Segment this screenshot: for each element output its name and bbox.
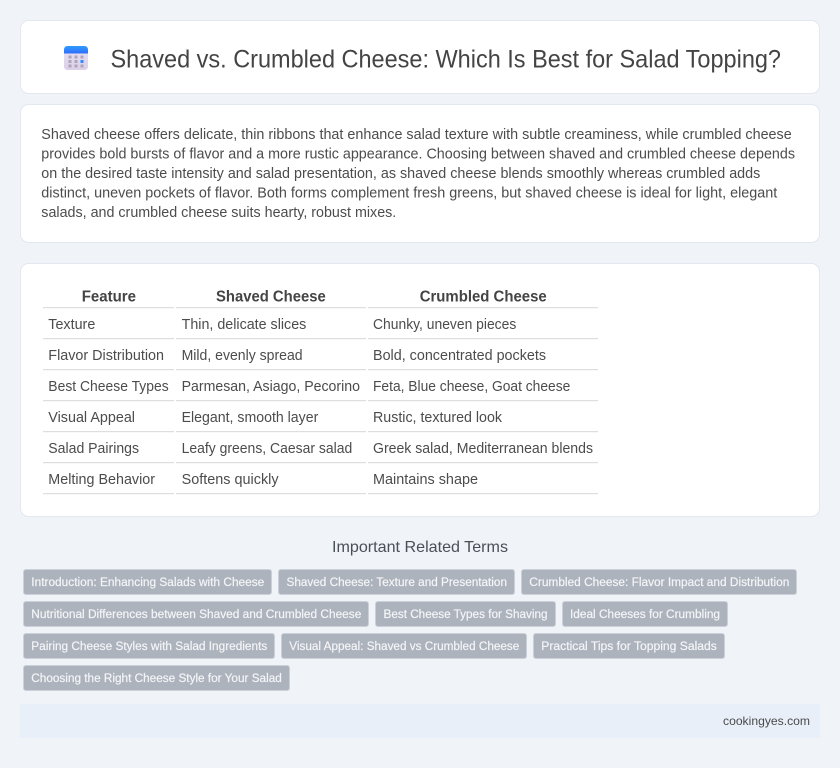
table row: best cheese types: Parmesan, Asiago, Pecorino — [182, 379, 360, 395]
table row: best cheese types: Feta, Blue cheese, Goat cheese — [373, 379, 570, 395]
tag: visual appeal — [282, 634, 526, 658]
tag: nutritional differences: Nutritional Differences between Shaved and Crumbled Cheese — [31, 607, 362, 621]
footer — [20, 704, 820, 738]
table row: visual appeal: Elegant, smooth layer — [182, 410, 318, 426]
tag: practical tips — [534, 634, 724, 658]
tag list: related terms — [24, 570, 796, 690]
table row: texture: Texture — [48, 317, 95, 333]
tag: pairing cheese styles: Pairing Cheese Styles with Salad Ingredients — [31, 639, 267, 653]
tag: practical tips: Practical Tips for Topping Salads — [541, 639, 717, 653]
text block: introduction paragraph: Shaved cheese offers delicate, thin ribbons that enhance salad texture with subtle creaminess, while crumbled cheese — [41, 127, 792, 143]
table row: melting behavior: Maintains shape — [373, 472, 478, 488]
table header row: Crumbled Cheese — [420, 288, 547, 306]
tag: choosing the right style: Choosing the Right Cheese Style for Your Salad — [31, 671, 282, 685]
panel: comparison table — [20, 264, 820, 516]
table row: texture — [43, 317, 598, 339]
tag: shaved cheese: Shaved Cheese: Texture and Presentation — [286, 575, 507, 589]
table header row — [43, 288, 598, 308]
table row: melting behavior — [43, 472, 598, 494]
tag: nutritional differences — [24, 602, 368, 626]
tag: choosing the right style — [24, 666, 290, 690]
text block: introduction paragraph: salads, and crumbled cheese suits hearty, robust mixes. — [41, 205, 396, 221]
text block: introduction paragraph: distinct, uneven pockets of flavor. Both forms complement fresh greens, but shaved cheese is ideal for light, elegant — [41, 186, 777, 202]
table row: flavor distribution: Bold, concentrated pockets — [373, 348, 546, 364]
tag: crumbled cheese: Crumbled Cheese: Flavor Impact and Distribution — [529, 575, 789, 589]
table row: melting behavior: Softens quickly — [182, 472, 279, 488]
title: Shaved vs. Crumbled Cheese: Which Is Best for Salad Topping? — [110, 46, 781, 74]
table row: visual appeal — [43, 410, 598, 432]
table row: visual appeal: Rustic, textured look — [373, 410, 503, 426]
tag: best cheese types: Best Cheese Types for Shaving — [384, 607, 548, 621]
icon: calendar — [64, 46, 88, 70]
tag: shaved cheese — [278, 570, 514, 594]
tag: best cheese types — [376, 602, 556, 626]
table row: best cheese types: Best Cheese Types — [48, 379, 169, 395]
table row: flavor distribution — [43, 348, 598, 370]
table row: salad pairings: Salad Pairings — [48, 441, 139, 457]
tag: introduction: Introduction: Enhancing Salads with Cheese — [31, 575, 265, 589]
footer source text: cookingyes.com — [723, 714, 810, 728]
panel: introduction — [20, 104, 820, 242]
tag: crumbled cheese — [522, 570, 796, 594]
text block: introduction paragraph: provides bold bursts of flavor and a more rustic appearance. Choosing between shaved and crumbled cheese depends — [41, 146, 795, 162]
table row: salad pairings: Greek salad, Mediterranean blends — [373, 441, 593, 457]
tag: visual appeal: Visual Appeal: Shaved vs Crumbled Cheese — [289, 639, 520, 653]
table header row: Feature — [82, 288, 136, 306]
text block: introduction paragraph: on the desired taste intensity and salad presentation, as shaved cheese blends smoothly whereas crumbled adds — [41, 166, 760, 182]
tag: introduction — [24, 570, 272, 594]
table header row: Shaved Cheese — [216, 288, 326, 306]
table row: salad pairings — [43, 441, 598, 463]
table row: best cheese types — [43, 379, 598, 401]
heading: important related terms: Important Related Terms — [332, 539, 508, 556]
text block: introduction paragraph — [41, 127, 795, 221]
table row: texture: Thin, delicate slices — [182, 317, 306, 333]
table row: flavor distribution: Mild, evenly spread — [182, 348, 303, 364]
table row: visual appeal: Visual Appeal — [48, 410, 135, 426]
table row: flavor distribution: Flavor Distribution — [48, 348, 164, 364]
tag: ideal cheeses — [562, 602, 728, 626]
panel: header — [20, 20, 820, 94]
tag: ideal cheeses: Ideal Cheeses for Crumbling — [570, 607, 720, 621]
table row: salad pairings: Leafy greens, Caesar salad — [182, 441, 352, 457]
table row: texture: Chunky, uneven pieces — [373, 317, 516, 333]
tag: pairing cheese styles — [24, 634, 274, 658]
table row: melting behavior: Melting Behavior — [48, 472, 155, 488]
